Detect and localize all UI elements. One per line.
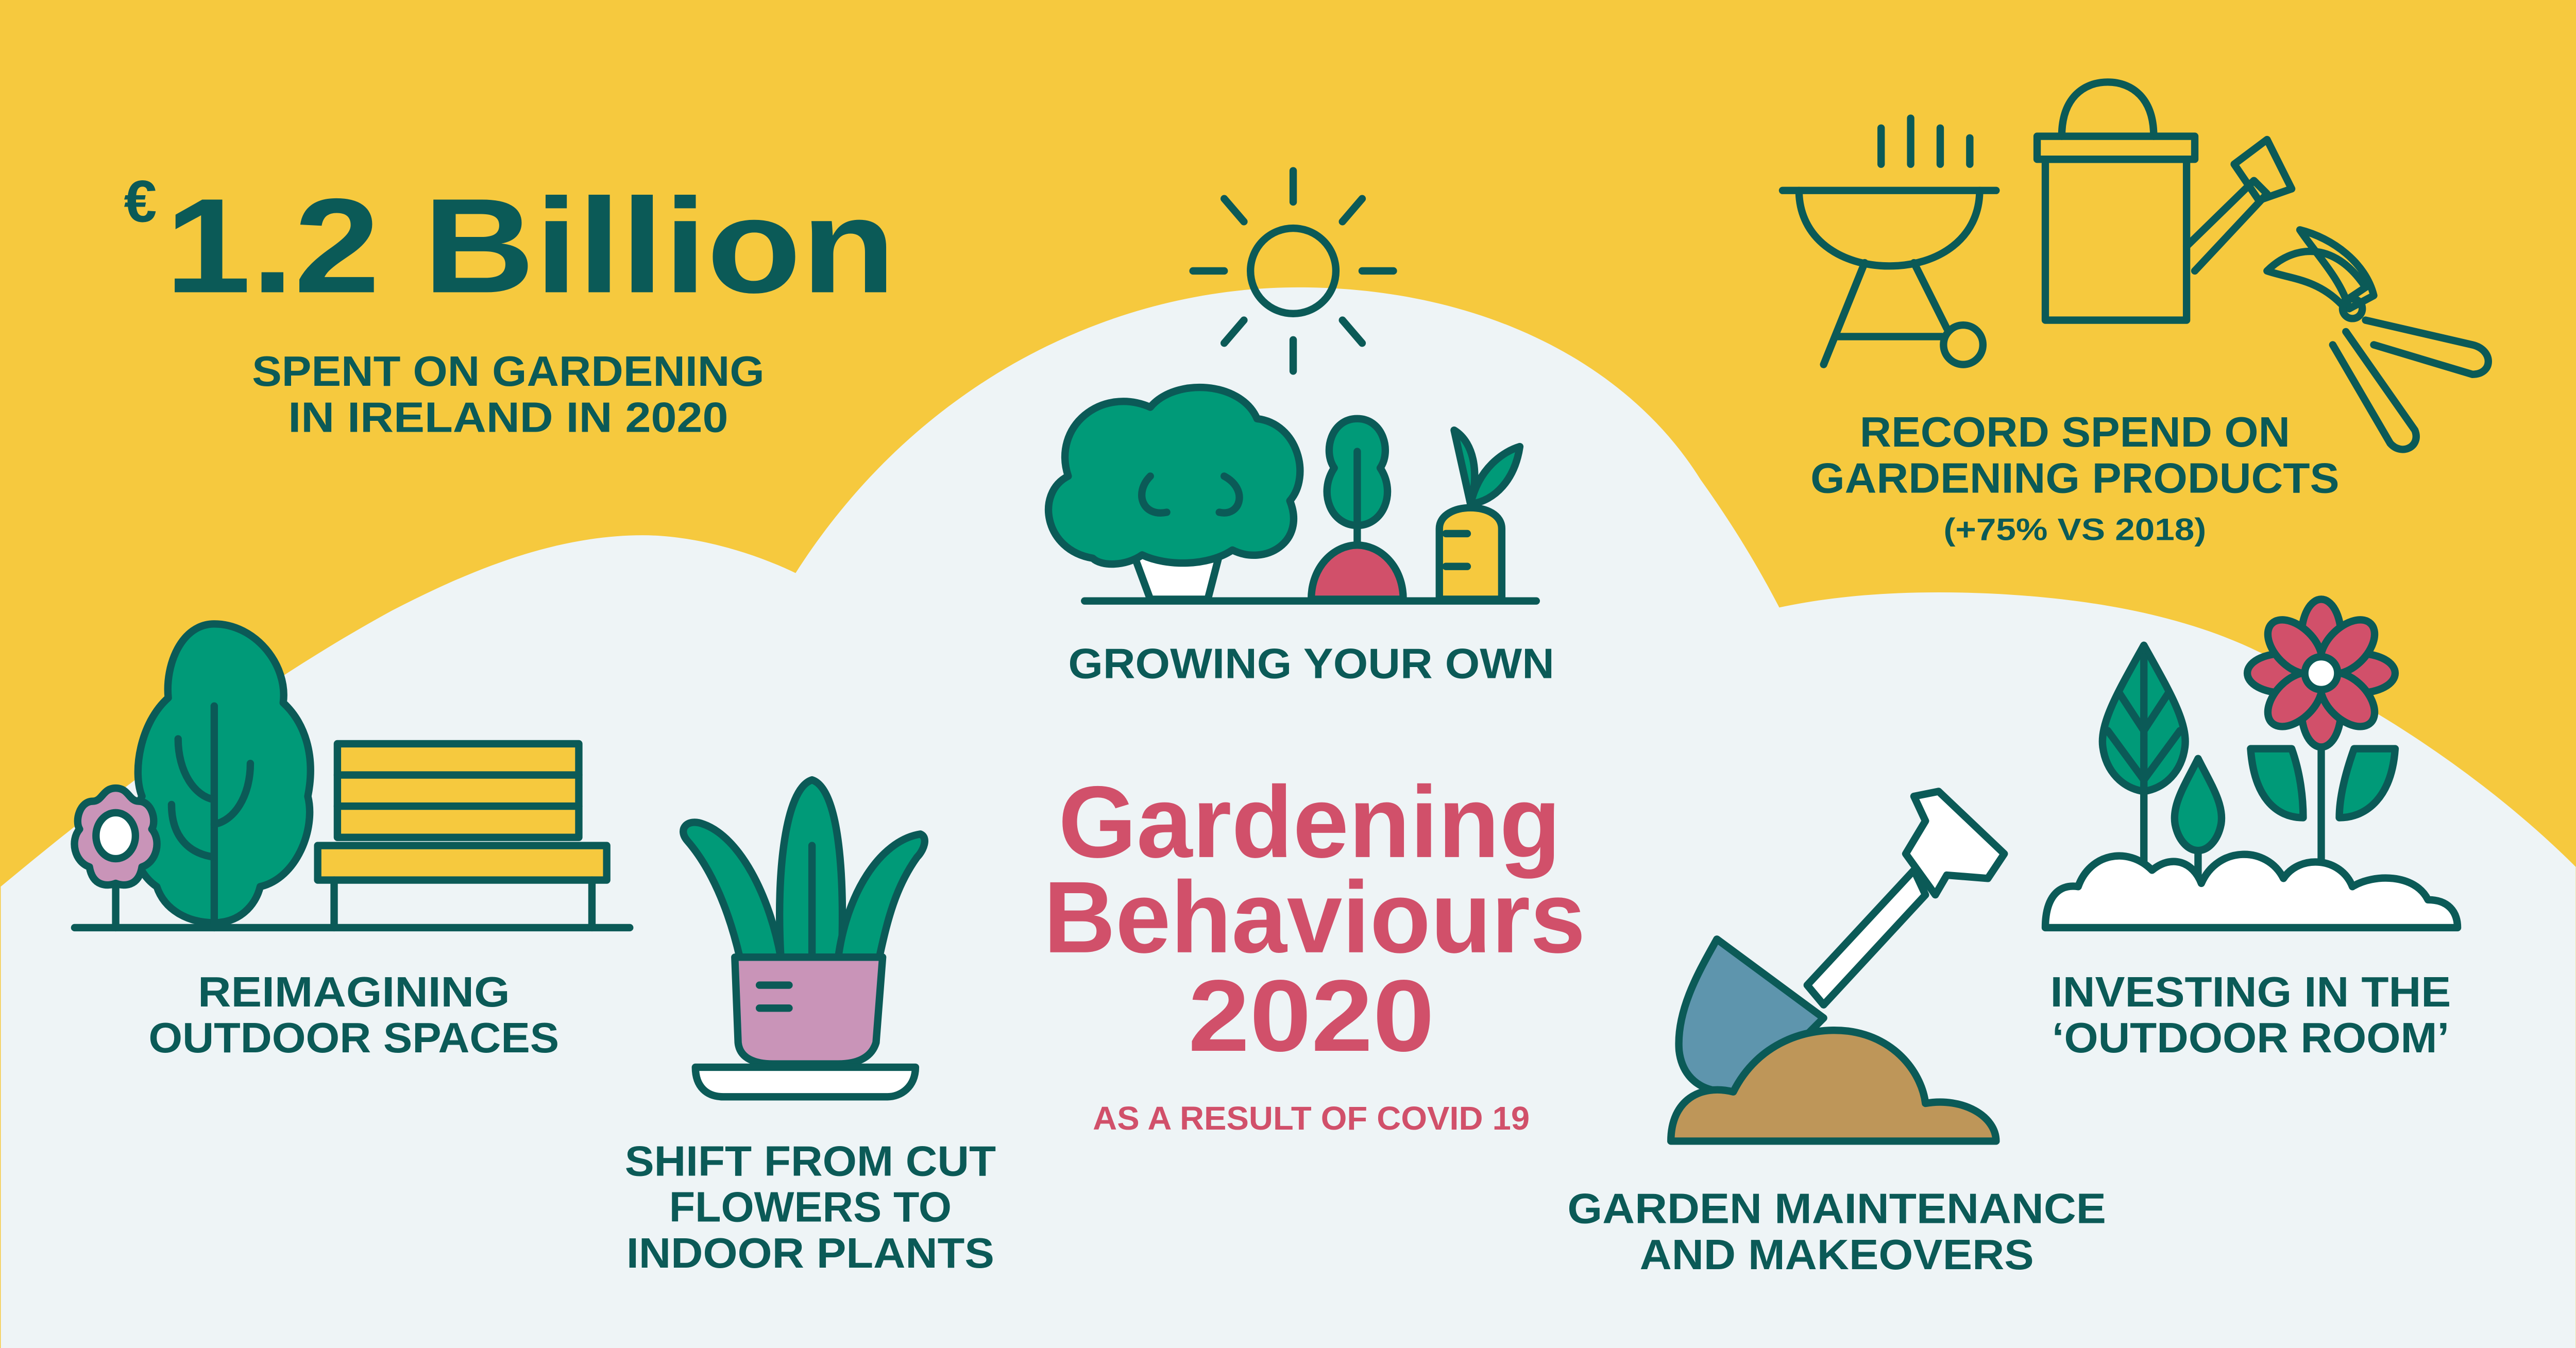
label: investing in outdoor room <box>2050 968 2451 1062</box>
stat subtitle: IN IRELAND IN 2020 <box>288 393 728 441</box>
label: reimagining outdoor spaces: REIMAGINING <box>198 968 510 1016</box>
icon: outdoor room plants <box>2045 599 2458 928</box>
headline stat: 1.2 Billion <box>165 170 896 321</box>
stat subtitle: SPENT ON GARDENING <box>252 347 765 395</box>
main title: Gardening <box>1058 765 1561 879</box>
label: shift to indoor plants: FLOWERS TO <box>669 1183 952 1231</box>
label: shift to indoor plants: INDOOR PLANTS <box>626 1229 994 1277</box>
label: record spend: (+75% VS 2018) <box>1943 512 2206 547</box>
label: reimagining outdoor spaces <box>148 968 559 1062</box>
icon: tree and bench <box>74 624 630 928</box>
main title: 2020 <box>1188 959 1434 1072</box>
label: record spend <box>1810 408 2340 547</box>
headline stat: € <box>124 168 157 234</box>
label: record spend: GARDENING PRODUCTS <box>1810 454 2340 502</box>
icon: watering can <box>2037 82 2292 320</box>
icon: vegetables <box>1048 387 1536 601</box>
main title: Behaviours <box>1044 860 1585 974</box>
main title <box>1044 765 1585 1072</box>
label: garden maintenance: GARDEN MAINTENANCE <box>1567 1185 2106 1233</box>
label: investing in outdoor room: INVESTING IN THE <box>2050 968 2451 1016</box>
stat subtitle <box>252 347 765 441</box>
icon: potted plant <box>683 780 925 1097</box>
label: garden maintenance <box>1567 1185 2106 1278</box>
label: garden maintenance: AND MAKEOVERS <box>1640 1231 2034 1278</box>
icon: bbq <box>1783 118 1996 365</box>
subtitle: covid: AS A RESULT OF COVID 19 <box>1093 1100 1530 1137</box>
label: investing in outdoor room: ‘OUTDOOR ROOM’ <box>2052 1014 2449 1062</box>
background cloud <box>1 287 2576 1348</box>
label: shift to indoor plants: SHIFT FROM CUT <box>625 1137 996 1185</box>
label: growing your own: GROWING YOUR OWN <box>1068 639 1554 687</box>
label: record spend: RECORD SPEND ON <box>1860 408 2290 456</box>
label: shift to indoor plants <box>625 1137 996 1277</box>
icon: sun <box>1193 171 1394 371</box>
icon: shears <box>2267 230 2488 449</box>
icon: shovel and soil <box>1671 791 2004 1141</box>
label: reimagining outdoor spaces: OUTDOOR SPACES <box>148 1014 559 1062</box>
